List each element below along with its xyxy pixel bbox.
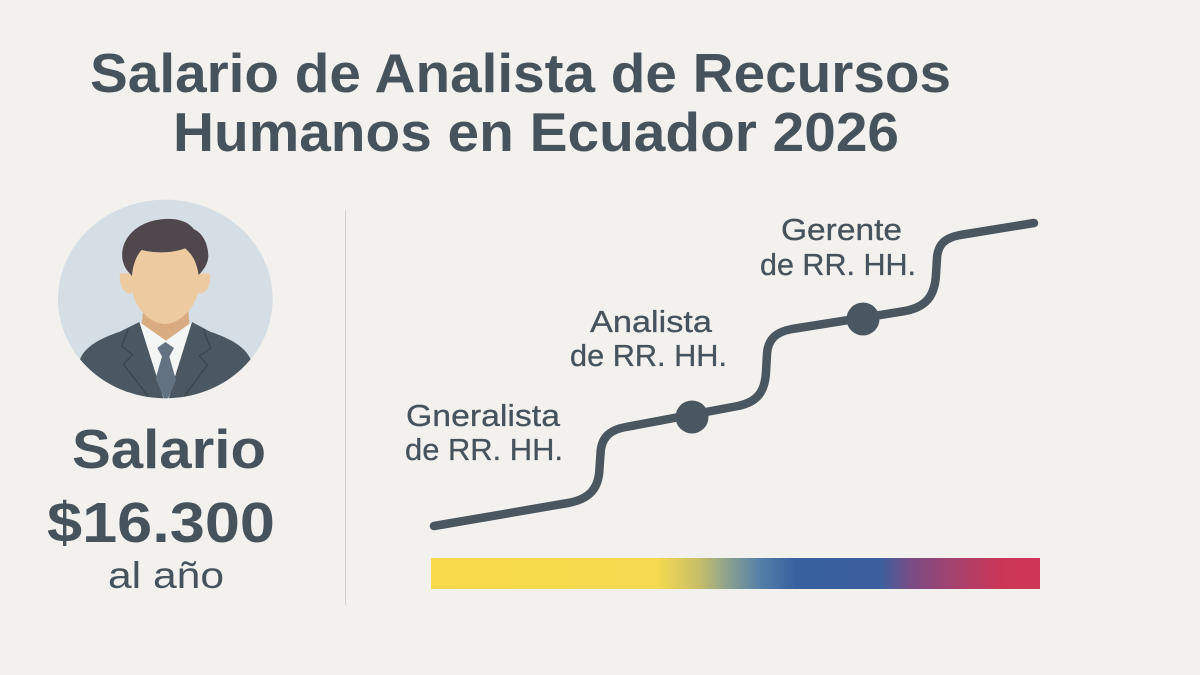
label: generalista: de RR. HH. [405,432,563,467]
label: generalista: Gneralista [406,398,561,433]
label: gerente: de RR. HH. [760,247,916,282]
milestone: gerente [846,302,880,336]
title: Humanos en Ecuador 2026 [173,101,899,163]
icon: analyst avatar [58,200,273,410]
label: analista: Analista [590,304,713,339]
career path line chart [434,223,1034,526]
salary period: al año [108,555,224,596]
milestone: analista [676,400,708,434]
label: analista: de RR. HH. [570,338,727,373]
label: gerente [760,212,916,282]
title [90,42,951,163]
label: analista [570,304,727,373]
colour bar: Ecuador flag gradient [431,558,1040,589]
salary amount: $16.300 [47,491,275,555]
title: Salario de Analista de Recursos [90,42,951,104]
label: gerente: Gerente [781,212,902,247]
salary heading: Salario [72,418,266,480]
label: generalista [405,398,563,467]
